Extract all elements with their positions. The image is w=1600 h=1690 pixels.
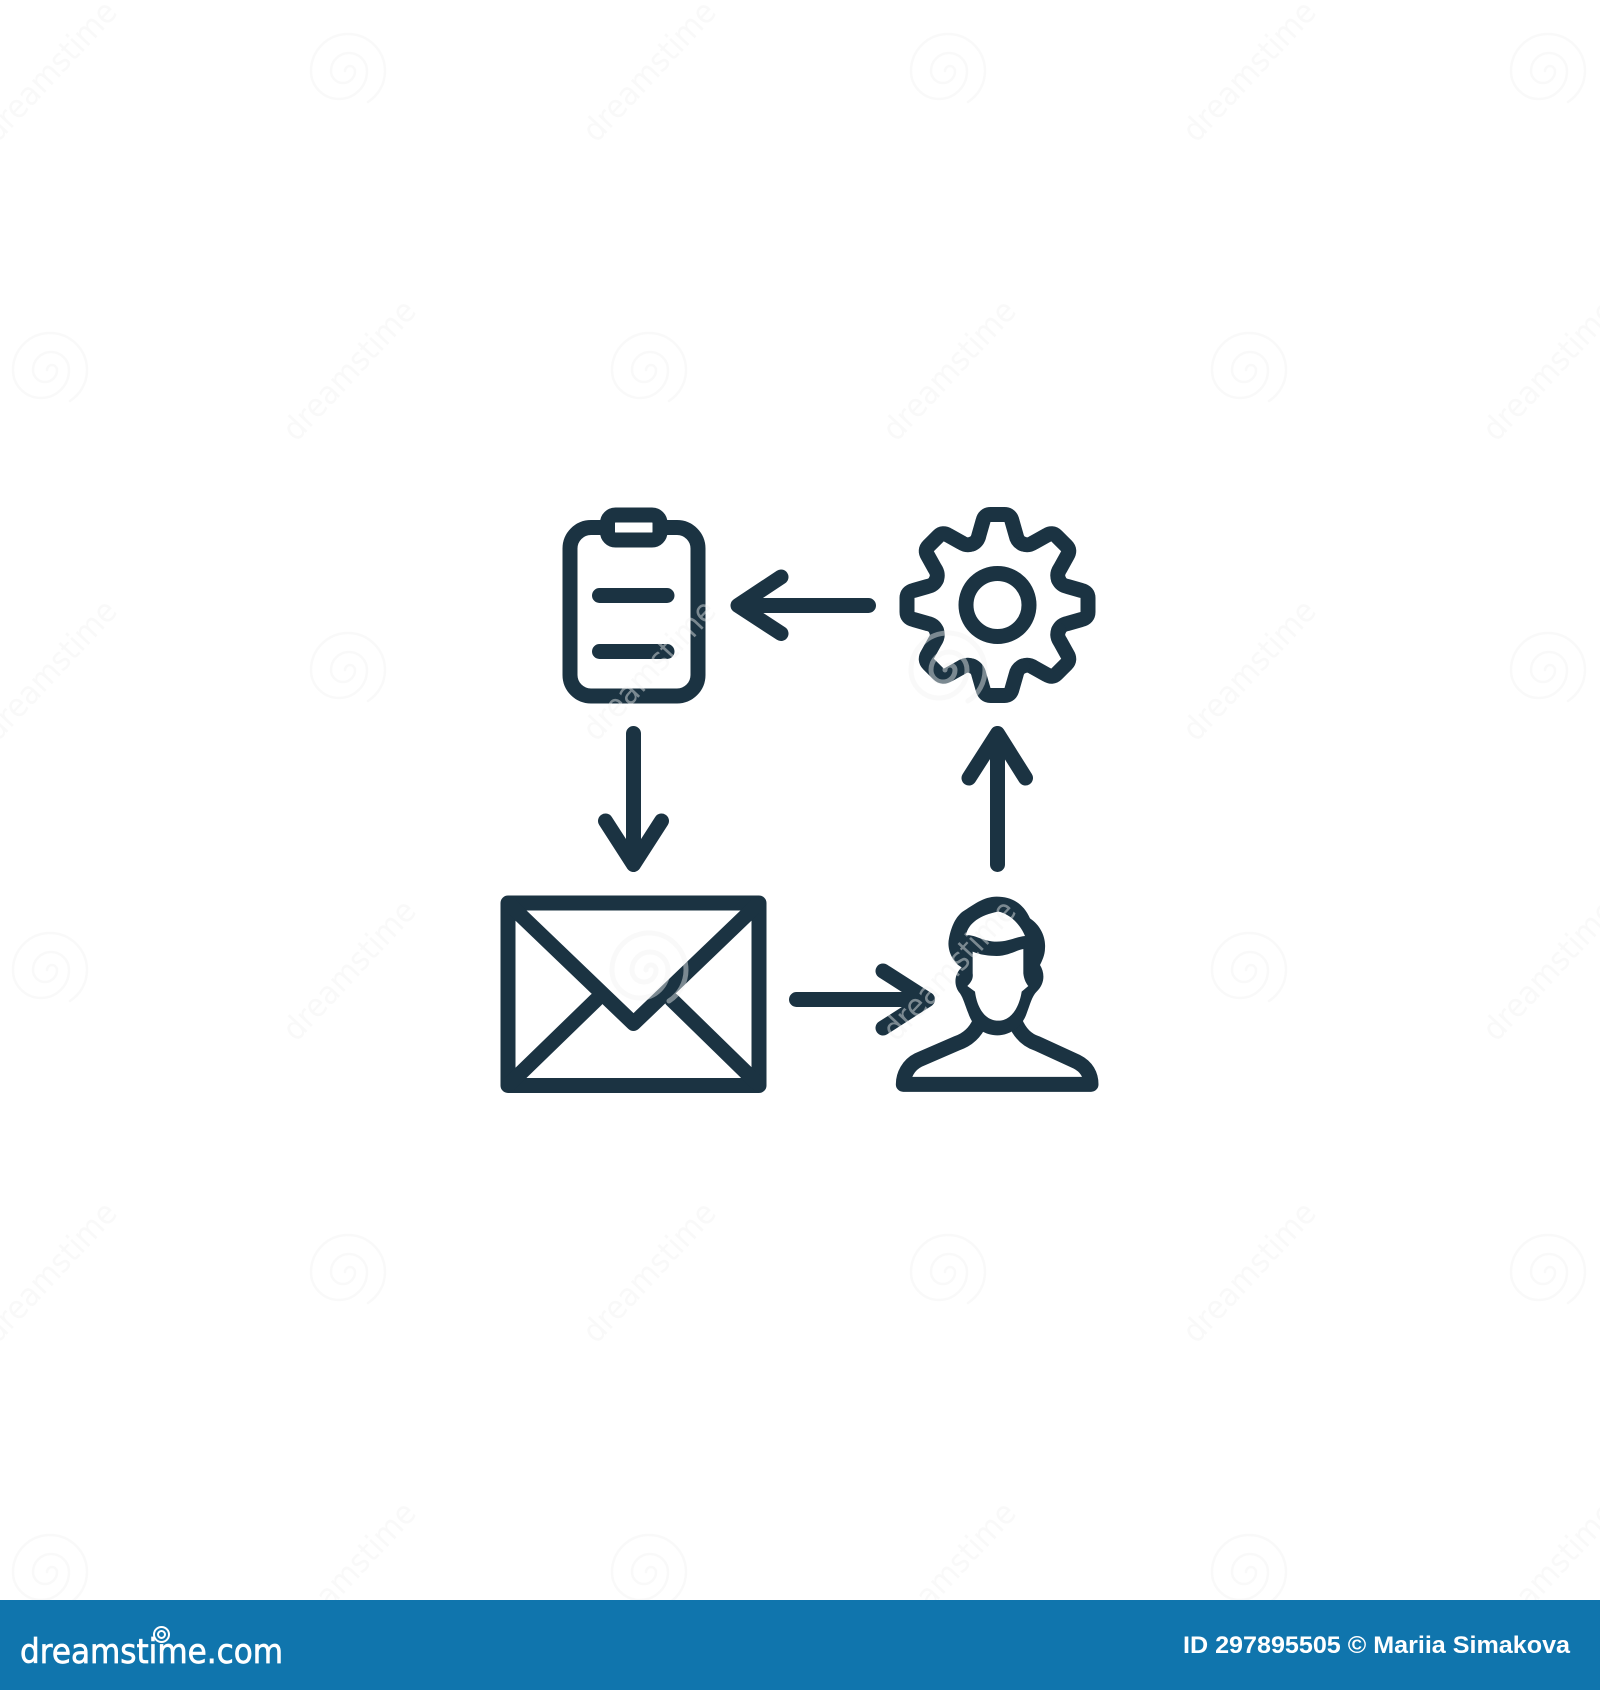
cycle diagram [508, 514, 1091, 1086]
icon: clipboard [570, 515, 698, 696]
watermark text: dreamstime [874, 1494, 1024, 1650]
arrow: person to gear [969, 734, 1026, 864]
watermark text: dreamstime [1174, 592, 1324, 748]
image id and credit: ID 297895505 © Mariia Simakova [1183, 1632, 1571, 1659]
watermark text: dreamstime [874, 892, 1024, 1048]
icon: logo swirl [154, 1627, 169, 1642]
icon: gear [907, 514, 1088, 696]
arrow: envelope to person [796, 971, 928, 1028]
icon: envelope [508, 903, 759, 1086]
icon: person [903, 897, 1091, 1084]
watermark text: dreamstime [1174, 1194, 1324, 1350]
arrow: gear to clipboard [738, 577, 868, 634]
watermark text: dreamstime [274, 892, 424, 1048]
footer logo text: dreamstime.com [20, 1632, 283, 1672]
watermark text: dreamstime [574, 1194, 724, 1350]
watermark text: dreamstime [274, 292, 424, 448]
arrow: clipboard to envelope [606, 734, 662, 864]
watermark text: dreamstime [274, 1494, 424, 1650]
watermark text: dreamstime [574, 592, 724, 748]
footer band [0, 1600, 1600, 1690]
watermark text: dreamstime [874, 292, 1024, 448]
